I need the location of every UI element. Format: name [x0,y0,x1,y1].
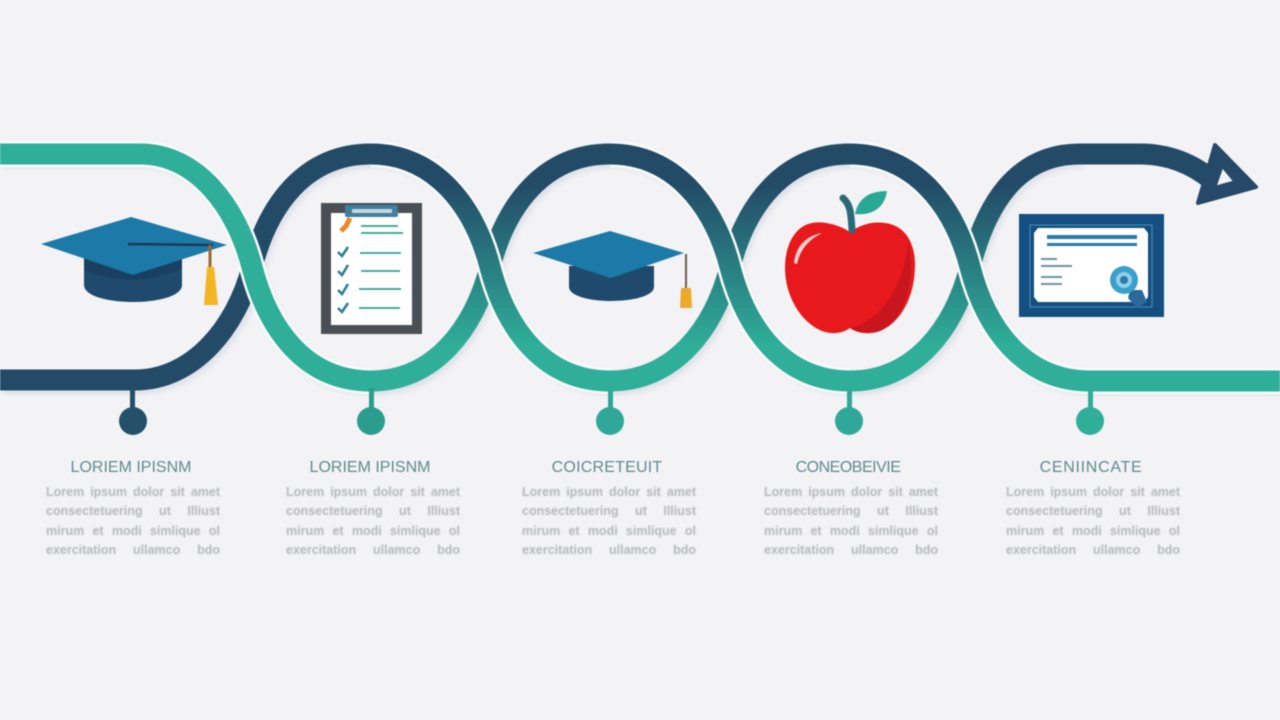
connector dot 4 [835,388,863,435]
body: step 4: mirum et modi simlique ol [764,524,938,538]
ribbon soft shadow [3,158,1280,385]
body: step 1 [46,485,220,557]
body: step 5: Lorem ipsum dolor sit amet [1006,485,1180,499]
text block: step 3 [522,459,696,557]
text block: step 1 [46,459,220,557]
body: step 1: Lorem ipsum dolor sit amet [46,485,220,499]
icon: certificate [1019,214,1164,317]
body: step 4 [764,485,938,557]
text block: step 4 [764,459,938,557]
heading: step 3: COICRETEUIT [552,459,662,476]
body: step 2: consectetuering ut Illiust [286,504,460,518]
body: step 2: Lorem ipsum dolor sit amet [286,485,460,499]
body: step 4: consectetuering ut Illiust [764,504,938,518]
body: step 5: exercitation ullamco bdo [1006,543,1180,557]
body: step 1: consectetuering ut Illiust [46,504,220,518]
body: step 3 [522,485,696,557]
arrow head [1198,145,1256,203]
body: step 3: consectetuering ut Illiust [522,504,696,518]
connector dot 1 [119,388,147,435]
body: step 1: mirum et modi simlique ol [46,524,220,538]
body: step 5: mirum et modi simlique ol [1006,524,1180,538]
heading: step 2: LORIEM IPISNM [310,459,430,476]
icon: small graduation cap [533,231,692,308]
body: step 3: Lorem ipsum dolor sit amet [522,485,696,499]
body: step 5 [1006,485,1180,557]
connector dot 3 [596,388,624,435]
body: step 4: exercitation ullamco bdo [764,543,938,557]
body: step 2: exercitation ullamco bdo [286,543,460,557]
body: step 2: mirum et modi simlique ol [286,524,460,538]
icon: clipboard checklist [321,203,422,334]
heading: step 5: CENIINCATE [1040,459,1142,476]
connector dot 5 [1076,388,1104,435]
icon: large graduation cap [41,217,227,305]
icon: red apple [785,191,915,333]
body: step 5: consectetuering ut Illiust [1006,504,1180,518]
heading: step 1: LORIEM IPISNM [71,459,191,476]
body: step 1: exercitation ullamco bdo [46,543,220,557]
body: step 2 [286,485,460,557]
ribbon: over strands [0,154,1280,381]
body: step 3: mirum et modi simlique ol [522,524,696,538]
body: step 3: exercitation ullamco bdo [522,543,696,557]
connector dot 2 [357,388,385,435]
text block: step 5 [1006,459,1180,557]
body: step 4: Lorem ipsum dolor sit amet [764,485,938,499]
ribbon: under strands [0,154,1212,381]
heading: step 4: CONEOBEIVIE [796,459,900,476]
text block: step 2 [286,459,460,557]
